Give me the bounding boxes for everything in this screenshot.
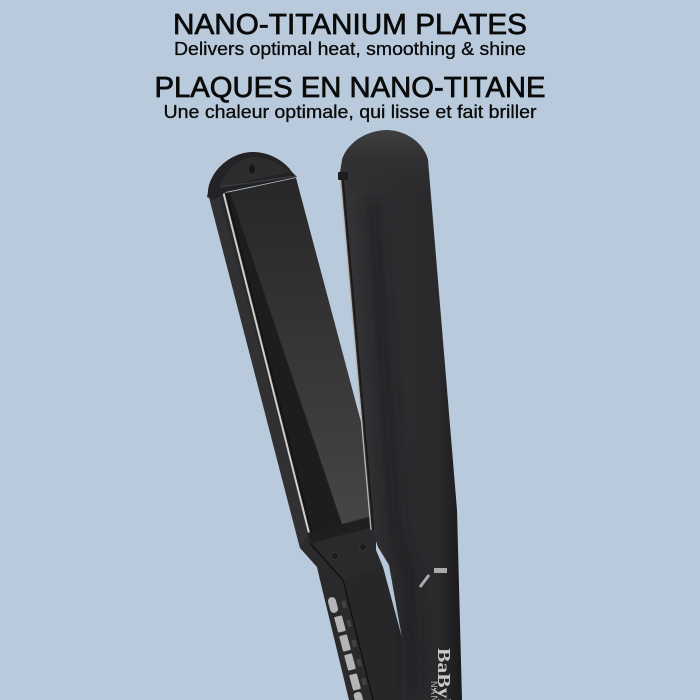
dark wedge beside plate bbox=[223, 192, 343, 533]
side notch bbox=[338, 172, 348, 180]
chrome edge strip bbox=[224, 193, 309, 533]
subtitle: French: Une chaleur optimale, qui lisse et fait briller bbox=[164, 102, 536, 122]
right arm body bbox=[340, 130, 462, 700]
subtitle: English: Delivers optimal heat, smoothing & shine bbox=[174, 39, 526, 59]
cap screw bbox=[249, 164, 255, 174]
handle separator line bbox=[310, 543, 373, 700]
indicator tick horizontal bbox=[434, 568, 447, 573]
temperature buttons bbox=[327, 596, 365, 700]
title: French: PLAQUES EN NANO-TITANE bbox=[154, 72, 546, 104]
cap ridge bbox=[220, 176, 296, 187]
inner dark shading band bbox=[366, 200, 418, 695]
titanium plate bbox=[230, 178, 385, 524]
top cap bbox=[207, 152, 297, 200]
right arm of flat iron bbox=[338, 130, 462, 700]
chrome side strip bbox=[340, 180, 371, 530]
lower plate bar bbox=[307, 514, 385, 543]
left arm of flat iron bbox=[207, 152, 402, 700]
button labels bbox=[341, 601, 367, 685]
left arm body bbox=[209, 178, 402, 700]
indicator tick diagonal bbox=[420, 575, 429, 587]
handle panel bbox=[343, 567, 402, 700]
outer side edge bbox=[209, 195, 309, 548]
title: English: NANO-TITANIUM PLATES bbox=[173, 9, 527, 41]
heading block bbox=[154, 9, 546, 122]
neck screws bbox=[332, 544, 366, 560]
top shading bbox=[342, 130, 430, 195]
